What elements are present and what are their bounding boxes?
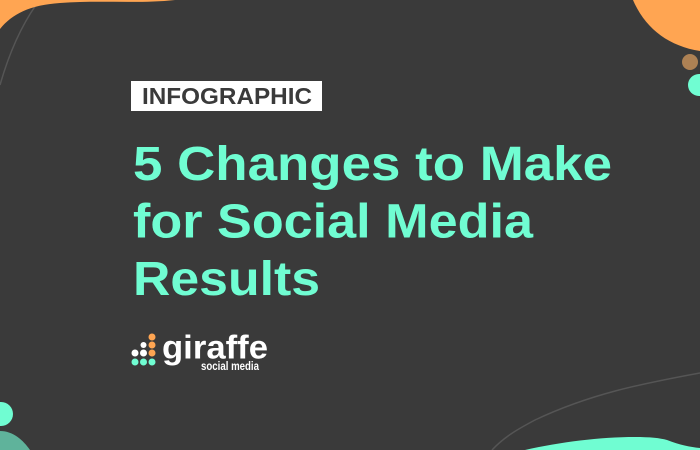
blob: bottom-right mint <box>525 437 700 450</box>
logo: giraffe social media <box>132 328 268 373</box>
logo icon: dots <box>132 334 156 366</box>
label badge: INFOGRAPHIC <box>142 83 312 109</box>
title <box>133 138 612 306</box>
dot: top-right mint <box>688 74 700 96</box>
dot: muted orange <box>682 54 698 70</box>
blob: top-left orange <box>0 0 175 29</box>
blob: top-right orange <box>633 0 700 51</box>
title: for Social Media <box>133 196 533 248</box>
blob: bottom-left muted teal <box>0 431 30 450</box>
title: Results <box>133 253 320 306</box>
logo tagline: social media <box>201 359 259 373</box>
logo wordmark: giraffe <box>162 328 268 366</box>
dot: bottom-left mint <box>0 402 13 426</box>
title: 5 Changes to Make <box>133 138 612 191</box>
